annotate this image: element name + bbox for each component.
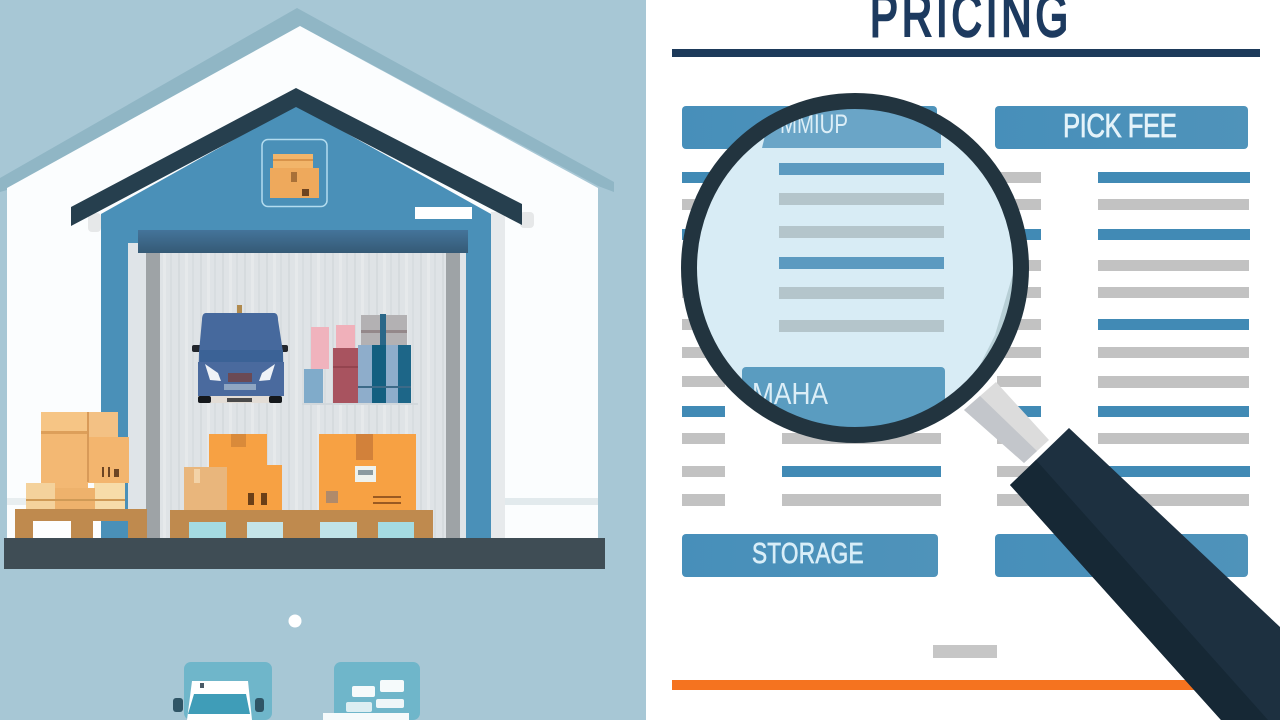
lens: MMIUP	[780, 109, 848, 139]
white dot	[288, 614, 302, 628]
side shelf line right	[505, 498, 598, 505]
handle neck	[964, 382, 1049, 463]
roof icon: box	[262, 140, 327, 206]
stacked goods on shelf	[304, 314, 411, 403]
dark roof	[71, 88, 522, 226]
panel: pricing sheet	[672, 0, 1260, 690]
orange total rule	[672, 680, 1202, 690]
header: left column	[682, 106, 937, 149]
outer house wall	[7, 26, 598, 538]
eave shadow right	[520, 212, 534, 228]
lens: MAHA	[752, 376, 828, 411]
lens ring	[689, 101, 1021, 435]
footer value	[933, 645, 997, 658]
header: storage	[682, 534, 938, 577]
rows: column three	[997, 172, 1041, 506]
rows: column two	[782, 433, 941, 506]
center boxes	[184, 434, 282, 510]
side shelf line left	[7, 498, 41, 505]
white sign	[415, 207, 472, 219]
icon: magnifying glass	[680, 90, 1280, 720]
floor slab	[4, 538, 605, 569]
header: pick fee: PICK FEE	[1063, 108, 1177, 145]
left pallet	[15, 509, 147, 538]
panel: warehouse illustration	[0, 8, 614, 569]
shelf line	[302, 403, 418, 405]
door opening	[128, 243, 466, 538]
header: storage: STORAGE	[752, 536, 864, 570]
header: lower right	[995, 534, 1248, 577]
title rule	[672, 49, 1260, 57]
icon tile: van	[173, 662, 272, 720]
rows: column four	[1098, 172, 1250, 506]
blue building front	[101, 105, 491, 538]
header: pick fee	[995, 106, 1248, 149]
right wall strip	[491, 212, 505, 538]
panel: warehouse background	[0, 0, 646, 720]
left box stack	[26, 412, 129, 510]
door roller bar	[138, 230, 468, 253]
large box with label	[319, 434, 416, 510]
lens	[697, 109, 1013, 427]
rows: column one	[682, 172, 725, 506]
icon: blue van	[192, 305, 288, 403]
outer roof shadow	[0, 8, 614, 192]
eave shadow left	[88, 213, 101, 232]
icon tile: boxes	[323, 662, 420, 720]
handle grip	[1010, 428, 1280, 720]
center pallet	[170, 510, 433, 538]
